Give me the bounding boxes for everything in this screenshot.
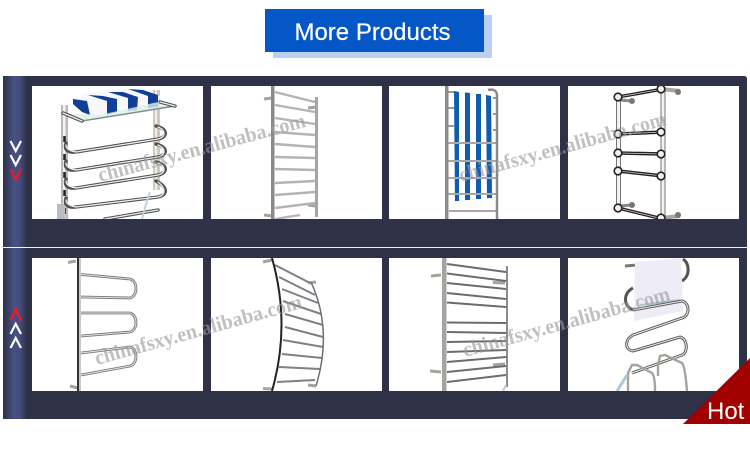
product card: rail with striped towel <box>389 86 560 219</box>
heading: More Products: More Products <box>294 19 451 46</box>
panel: dark product background <box>3 76 747 419</box>
icon: up chevrons <box>10 309 21 348</box>
heading: More Products <box>265 9 492 58</box>
watermark: top row left: chinafsxy.en.alibaba.com <box>95 108 308 187</box>
watermark: bottom row left: chinafsxy.en.alibaba.com <box>92 289 305 370</box>
product card: S-shaped rail with towel <box>568 258 739 391</box>
product card: tall ladder rail <box>389 258 560 391</box>
product card: swivel U rail <box>32 258 203 391</box>
badge: Hot corner <box>683 358 750 425</box>
watermark: bottom row right: chinafsxy.en.alibaba.com <box>460 281 673 362</box>
product card: ball-joint rail <box>568 85 739 222</box>
badge: Hot corner: Hot <box>707 398 745 425</box>
product card: shelf towel rail <box>32 86 203 219</box>
product card: curved ladder rail <box>211 258 382 391</box>
watermark: top row right: chinafsxy.en.alibaba.com <box>456 106 669 187</box>
product card: flat ladder rail <box>211 86 382 219</box>
icon: down chevrons <box>10 141 21 180</box>
